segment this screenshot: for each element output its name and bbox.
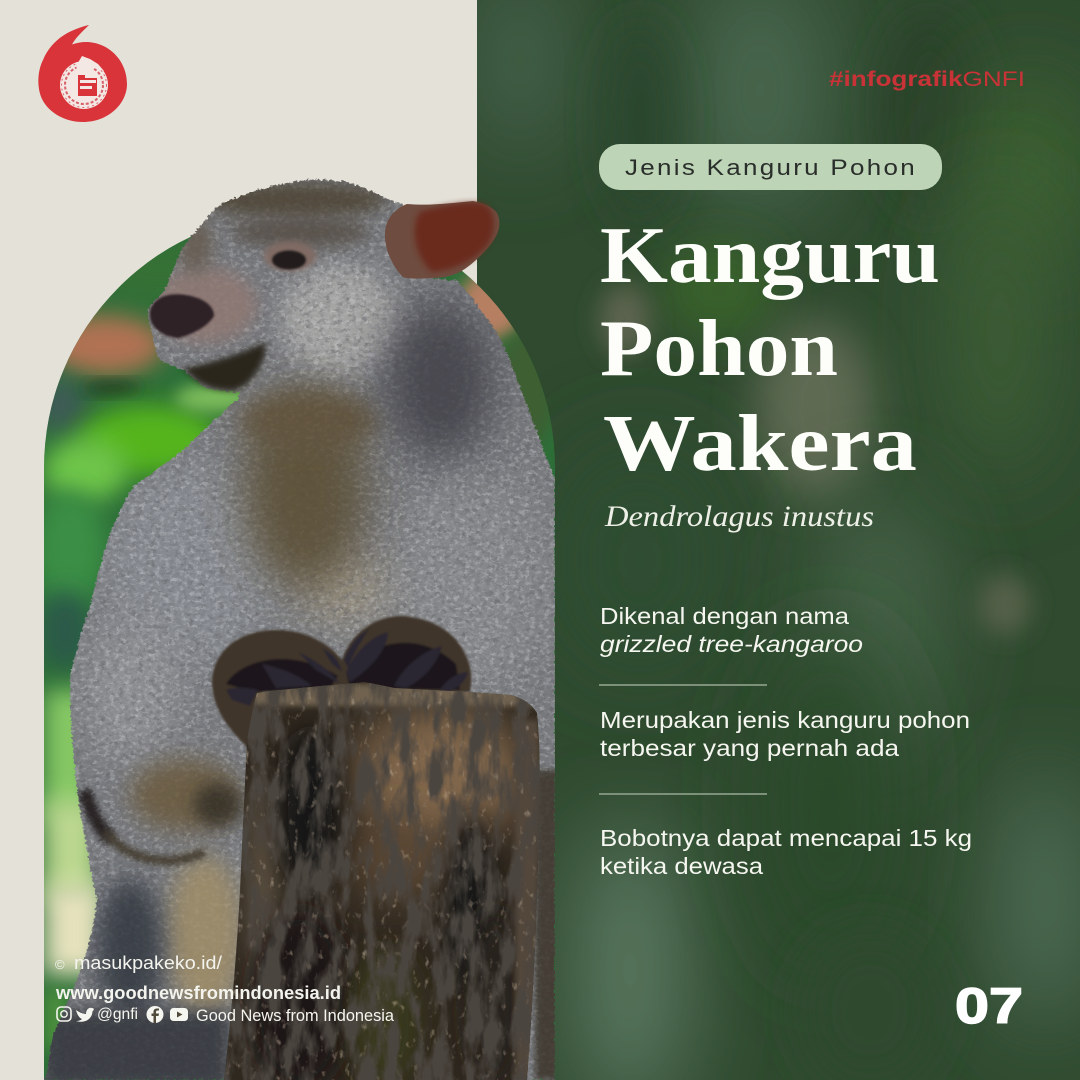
fact 1: Dikenal dengan nama bbox=[600, 603, 849, 629]
logo: GNFI red swirl bbox=[38, 25, 127, 122]
icon: instagram bbox=[57, 1007, 71, 1021]
handle: @gnfi bbox=[97, 1006, 138, 1023]
tree stump bbox=[220, 680, 550, 1080]
scientific name: Dendrolagus inustus bbox=[604, 500, 874, 533]
title bbox=[600, 210, 940, 488]
fact 2: terbesar yang pernah ada bbox=[600, 735, 899, 761]
title: Pohon bbox=[600, 303, 838, 393]
photo background: blurred foliage bbox=[32, 200, 555, 1080]
fact 1 bbox=[600, 603, 863, 657]
website url: www.goodnewsfromindonesia.id bbox=[55, 982, 341, 1003]
fact 3: Bobotnya dapat mencapai 15 kg bbox=[600, 825, 972, 851]
photo: tree kangaroo in arch bbox=[32, 170, 560, 1080]
organization name: Good News from Indonesia bbox=[196, 1006, 395, 1025]
photo credit: © bbox=[55, 957, 65, 972]
title: Kanguru bbox=[600, 210, 940, 300]
icon: facebook bbox=[146, 1006, 164, 1023]
fact 2: Merupakan jenis kanguru pohon bbox=[600, 707, 970, 733]
category pill bbox=[599, 144, 942, 190]
kangaroo eye bbox=[264, 241, 316, 271]
divider bbox=[599, 684, 767, 686]
page number: 07 bbox=[955, 978, 1023, 1034]
kangaroo paws and claws bbox=[212, 616, 471, 748]
category pill: Jenis Kanguru Pohon bbox=[625, 155, 917, 180]
fact 1: grizzled tree-kangaroo bbox=[600, 631, 863, 657]
background: blurred green foliage right panel bbox=[477, 0, 1080, 1080]
kangaroo body and head bbox=[40, 170, 560, 1080]
icon: youtube bbox=[170, 1008, 188, 1021]
fact 3 bbox=[600, 825, 972, 879]
photo credit: masukpakeko.id/ bbox=[74, 953, 222, 973]
kangaroo ear bbox=[385, 201, 499, 279]
social icons and handles bbox=[57, 1006, 395, 1025]
icon: twitter bbox=[76, 1008, 94, 1022]
background: cream left panel bbox=[0, 0, 477, 1080]
fact 3: ketika dewasa bbox=[600, 853, 763, 879]
hashtag: infografikGNFI: #infografik GNFI bbox=[829, 68, 1025, 91]
title: Wakera bbox=[603, 398, 917, 488]
kangaroo nose and muzzle bbox=[150, 294, 266, 391]
fact 2 bbox=[600, 707, 970, 761]
divider bbox=[599, 793, 767, 795]
